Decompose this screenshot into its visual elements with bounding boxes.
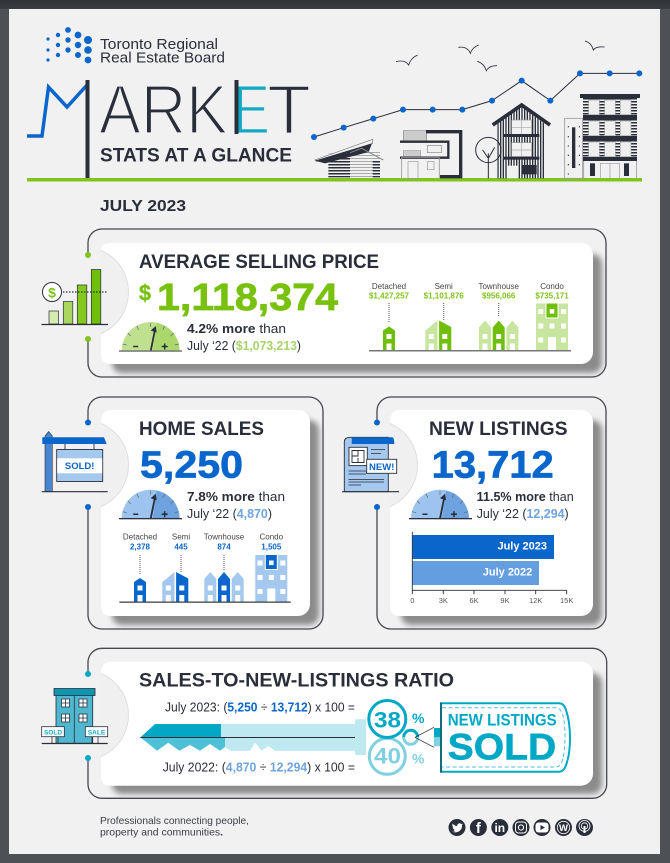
green ground line (27, 178, 642, 182)
icon: new listing document (342, 437, 399, 492)
birds (396, 41, 605, 71)
notch backdrop (390, 423, 418, 507)
bar chart: July 2023 vs July 2022 (410, 532, 573, 605)
property type chart (369, 282, 571, 352)
icon: bar chart with dollar: $ (48, 284, 56, 300)
title: MARKET: T (267, 70, 311, 148)
property type chart: Semi (435, 282, 453, 291)
icon: building with signs: SALE (88, 729, 106, 736)
tree (476, 137, 501, 178)
comparison text: July ‘22 ($1,073,213) (187, 339, 301, 353)
price value: $ (139, 280, 151, 306)
footer tagline: Professionals connecting people, (100, 815, 249, 827)
icon: wordpress (557, 821, 570, 834)
logo wordmark: Toronto Regional (100, 37, 218, 53)
property type chart: $956,066 (482, 292, 516, 300)
bar chart: July 2023 vs July 2022: 12K (529, 596, 542, 605)
property type chart (119, 532, 291, 603)
icon: linkedin: in (494, 821, 505, 835)
ratio circles: % (412, 710, 425, 726)
icon: wordpress: W (559, 823, 568, 834)
logo: Toronto Regional Real Estate Board (46, 27, 225, 67)
icon: sold sign (42, 432, 108, 492)
property type chart: $1,427,257 (369, 292, 410, 300)
key graphic (140, 719, 366, 755)
bar chart: July 2023 vs July 2022: 0 (410, 596, 414, 605)
panel shadow (401, 420, 602, 625)
comparison text: 4.2% more than (187, 322, 286, 336)
tag: new listings sold (415, 702, 570, 773)
sales value: 5,250 (140, 445, 243, 487)
panel outline (88, 648, 607, 798)
icon: instagram (516, 822, 526, 833)
connector dots (85, 252, 91, 342)
property type chart: 2,378 (130, 542, 151, 552)
property type chart: 1,505 (261, 542, 282, 552)
property type chart: Condo (260, 532, 284, 542)
footer tagline (100, 815, 249, 838)
panel shadow (112, 673, 602, 794)
property type chart: Townhouse (478, 282, 519, 291)
icon: new listing document: NEW! (369, 462, 394, 473)
gauge (409, 490, 472, 519)
property type chart: Townhouse (204, 532, 245, 542)
logo wordmark: Real Estate Board (100, 50, 225, 66)
white card (101, 410, 310, 616)
property type chart: Detached (372, 282, 406, 291)
property type chart: 874 (217, 542, 231, 552)
formula: July 2022: July 2022: (4,870 ÷ 12,294) x 100 = (163, 761, 355, 775)
property type chart: $735,171 (535, 292, 569, 300)
white card (101, 662, 593, 786)
gauge (119, 322, 182, 352)
comparison text: July ‘22 (4,870) (187, 507, 272, 521)
property type chart: Detached (123, 532, 157, 542)
notch backdrop (101, 423, 129, 507)
house 1 (315, 139, 383, 177)
notch backdrop (101, 673, 129, 757)
comparison text (477, 490, 574, 521)
tag: new listings sold: SOLD (448, 726, 556, 767)
heading: NEW LISTINGS (429, 418, 568, 440)
icon: bar chart with dollar (42, 270, 108, 324)
footer tagline: property and communities. (100, 826, 223, 838)
property type chart: 445 (174, 542, 188, 552)
panel outline (88, 229, 606, 377)
heading: AVERAGE SELLING PRICE (139, 251, 379, 273)
social icons (448, 819, 593, 837)
apartment building (565, 94, 640, 178)
connector dots (374, 420, 380, 510)
bar chart: July 2023 vs July 2022: 15K (560, 596, 573, 605)
bar chart: July 2023 vs July 2022: July 2023 (497, 541, 547, 553)
icon: building with signs (42, 688, 108, 744)
bar chart: July 2023 vs July 2022: 3K (439, 596, 448, 605)
ratio circles: % (412, 750, 425, 766)
ratio circles (369, 700, 425, 774)
price value: 1,118,374 (157, 277, 338, 319)
title: MARKET: E (233, 70, 270, 148)
date: JULY 2023 (100, 198, 186, 215)
subtitle: STATS AT A GLANCE (100, 146, 292, 166)
house 2 (400, 131, 461, 178)
property type chart: $1,101,876 (424, 292, 464, 300)
trend line (311, 70, 642, 140)
icon: podcast (579, 820, 590, 833)
listings value: 13,712 (432, 445, 554, 487)
heading: SALES-TO-NEW-LISTINGS RATIO (139, 670, 454, 692)
logo wordmark (100, 37, 225, 66)
connector dots (85, 671, 91, 761)
ratio circles: 38 (374, 708, 401, 733)
icon: sold sign: SOLD! (65, 461, 94, 472)
property type chart: Semi (172, 532, 190, 542)
formula: July 2023: July 2023: (5,250 ÷ 13,712) x 100 = (165, 701, 355, 715)
panel shadow (112, 254, 602, 373)
ratio circles: 40 (374, 744, 401, 768)
white card (101, 243, 593, 364)
icon: building with signs: SOLD (44, 729, 62, 736)
panel: home sales (42, 397, 323, 629)
panel: new listings (342, 397, 606, 629)
gauge (119, 490, 182, 519)
icon: facebook: f (476, 820, 482, 837)
bar chart: July 2023 vs July 2022: July 2022 (483, 567, 532, 579)
notch backdrop (101, 250, 129, 334)
icon: logo dots (46, 27, 92, 63)
property type chart: Condo (540, 282, 564, 291)
panel outline (377, 397, 606, 629)
panel: sales-to-new-listings ratio (42, 648, 607, 798)
panel outline (88, 397, 323, 629)
connector dots (85, 420, 91, 510)
white card (390, 410, 593, 616)
tag: new listings sold: NEW LISTINGS (448, 711, 557, 730)
comparison text (187, 490, 285, 521)
icon: youtube (536, 822, 548, 832)
house 3 (493, 105, 550, 178)
bar chart: July 2023 vs July 2022: 9K (500, 596, 510, 605)
title: MARKET (27, 70, 311, 181)
comparison text: 7.8% more than (187, 490, 285, 504)
title: MARKET: ARK (99, 70, 228, 148)
heading: HOME SALES (139, 418, 264, 440)
skyline illustration (311, 41, 642, 178)
bar chart: July 2023 vs July 2022: 6K (469, 596, 479, 605)
comparison text (187, 322, 301, 353)
panel shadow (112, 420, 319, 625)
comparison text: July ‘22 (12,294) (477, 507, 569, 521)
panel: average selling price (42, 229, 606, 377)
icon: twitter (452, 823, 463, 832)
comparison text: 11.5% more than (477, 490, 574, 504)
